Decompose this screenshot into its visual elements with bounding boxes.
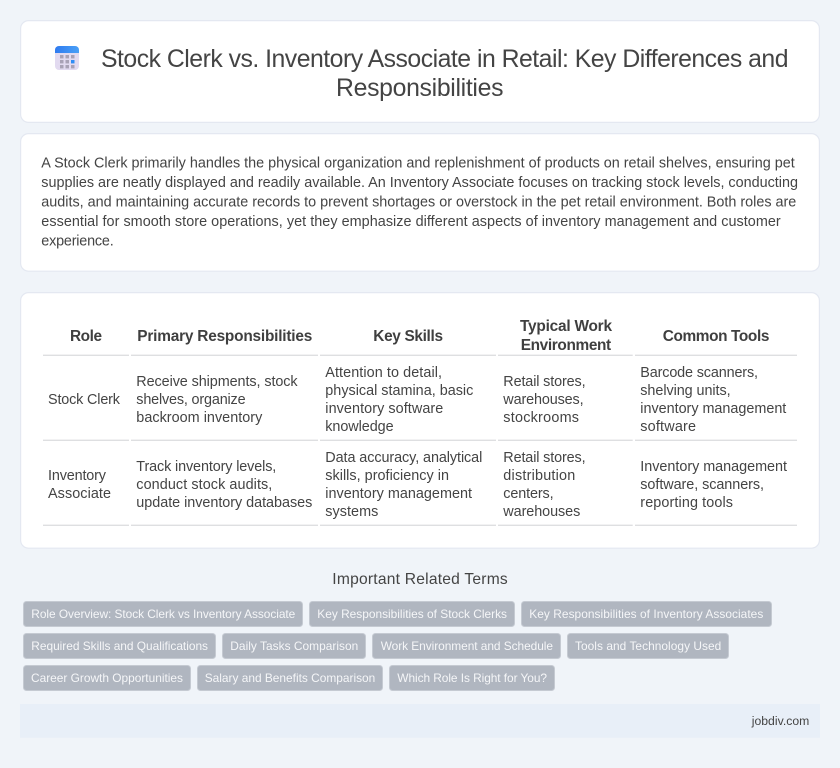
related terms tags bbox=[24, 602, 772, 690]
table row: Inventory Associate bbox=[48, 450, 787, 520]
table header row: Typical Work bbox=[520, 318, 612, 335]
intro text bbox=[41, 156, 798, 250]
tag: salary: Salary and Benefits Comparison bbox=[205, 671, 375, 685]
table row: Stock Clerk: stockrooms bbox=[503, 410, 579, 426]
table row: Stock Clerk: Attention to detail, bbox=[325, 365, 442, 381]
tag: stock clerk responsibilities bbox=[310, 602, 514, 626]
intro text: essential for smooth store operations, yet they emphasize different aspects of inventory management and customer bbox=[41, 214, 781, 230]
table row: Stock Clerk: Receive shipments, stock bbox=[136, 374, 298, 390]
tag: daily tasks: Daily Tasks Comparison bbox=[230, 639, 358, 653]
panel: comparison table bbox=[21, 293, 819, 548]
tag: tools bbox=[568, 634, 728, 658]
table header row: Common Tools bbox=[663, 328, 769, 345]
table row: Inventory Associate: distribution bbox=[503, 468, 575, 484]
table row: Inventory Associate: centers, bbox=[503, 486, 554, 502]
tag: role overview: Role Overview: Stock Clerk vs Inventory Associate bbox=[31, 607, 296, 621]
tag: which role: Which Role Is Right for You? bbox=[397, 671, 547, 685]
table row: Stock Clerk: software bbox=[640, 419, 696, 435]
table row: Stock Clerk: physical stamina, basic bbox=[325, 383, 473, 399]
tag: skills bbox=[24, 634, 216, 658]
intro text: experience. bbox=[41, 234, 114, 250]
table row: Inventory Associate: conduct stock audits, bbox=[136, 477, 272, 493]
title: Stock Clerk vs. Inventory Associate in Retail: Key Differences and bbox=[101, 46, 788, 73]
icon: calendar bbox=[55, 46, 79, 70]
table row: Stock Clerk: warehouses, bbox=[502, 392, 584, 408]
tag: stock clerk responsibilities: Key Responsibilities of Stock Clerks bbox=[317, 607, 507, 621]
table header row: Role bbox=[70, 328, 102, 345]
title bbox=[101, 46, 788, 102]
table row: Inventory Associate: software, scanners, bbox=[640, 477, 764, 493]
intro text: A Stock Clerk primarily handles the physical organization and replenishment of products on retail shelves, ensuring pet bbox=[41, 156, 795, 172]
table header row: Key Skills bbox=[373, 328, 443, 345]
tag: tools: Tools and Technology Used bbox=[575, 639, 721, 653]
table row: Stock Clerk: knowledge bbox=[325, 419, 394, 435]
table row: Inventory Associate: reporting tools bbox=[640, 495, 733, 511]
tag: daily tasks bbox=[222, 634, 366, 658]
tag: inventory associate responsibilities bbox=[522, 602, 772, 626]
table row: Stock Clerk: Barcode scanners, bbox=[640, 365, 758, 381]
table header row bbox=[70, 318, 769, 354]
tag: career growth: Career Growth Opportunities bbox=[31, 671, 183, 685]
footer bbox=[20, 704, 820, 738]
panel: title header bbox=[21, 21, 819, 122]
table row: Inventory Associate: inventory management bbox=[325, 486, 472, 502]
title: Responsibilities bbox=[336, 75, 504, 102]
table row: Inventory Associate: Track inventory levels, bbox=[136, 459, 276, 475]
table row: Stock Clerk: inventory management bbox=[640, 401, 786, 417]
tag: role overview bbox=[24, 602, 302, 626]
tag: career growth bbox=[24, 666, 190, 690]
tag: salary bbox=[198, 666, 382, 690]
table row: Stock Clerk: shelving units, bbox=[640, 383, 731, 399]
table row: Inventory Associate: warehouses bbox=[502, 504, 580, 520]
table row: Inventory Associate: systems bbox=[325, 504, 378, 520]
table row: Stock Clerk bbox=[48, 365, 786, 435]
tag: inventory associate responsibilities: Key Responsibilities of Inventory Associates bbox=[529, 607, 763, 621]
heading: Important Related Terms: Important Related Terms bbox=[332, 571, 508, 588]
footer: jobdiv.com bbox=[751, 714, 809, 728]
table row: Inventory Associate: skills, proficiency in bbox=[325, 468, 449, 484]
panel: intro paragraph bbox=[21, 134, 819, 271]
table row: Inventory Associate: Inventory management bbox=[640, 459, 787, 475]
tag: work environment: Work Environment and Schedule bbox=[381, 639, 553, 653]
table header row: Primary Responsibilities bbox=[137, 328, 312, 345]
table row: Stock Clerk: backroom inventory bbox=[136, 410, 263, 426]
table row: Stock Clerk: Stock Clerk bbox=[48, 392, 121, 408]
table row: Inventory Associate: update inventory databases bbox=[136, 495, 312, 511]
tag: skills: Required Skills and Qualifications bbox=[31, 639, 208, 653]
table row: Stock Clerk: Retail stores, bbox=[503, 374, 586, 390]
tag: work environment bbox=[372, 634, 560, 658]
intro text: supplies are neatly displayed and readily available. An Inventory Associate focuses on tracking stock levels, conducting bbox=[41, 175, 798, 191]
table row: Inventory Associate: Associate bbox=[48, 486, 111, 502]
table row: Inventory Associate: Retail stores, bbox=[503, 450, 586, 466]
intro text: audits, and maintaining accurate records to prevent shortages or overstock in the pet retail environment. Both roles are bbox=[41, 194, 796, 210]
table row: Stock Clerk: shelves, organize bbox=[136, 392, 246, 408]
table header row: Environment bbox=[521, 337, 611, 354]
tag: which role bbox=[390, 666, 554, 690]
table row: Inventory Associate: Data accuracy, analytical bbox=[325, 450, 482, 466]
table row: Stock Clerk: inventory software bbox=[325, 401, 443, 417]
table row: Inventory Associate: Inventory bbox=[48, 468, 107, 484]
